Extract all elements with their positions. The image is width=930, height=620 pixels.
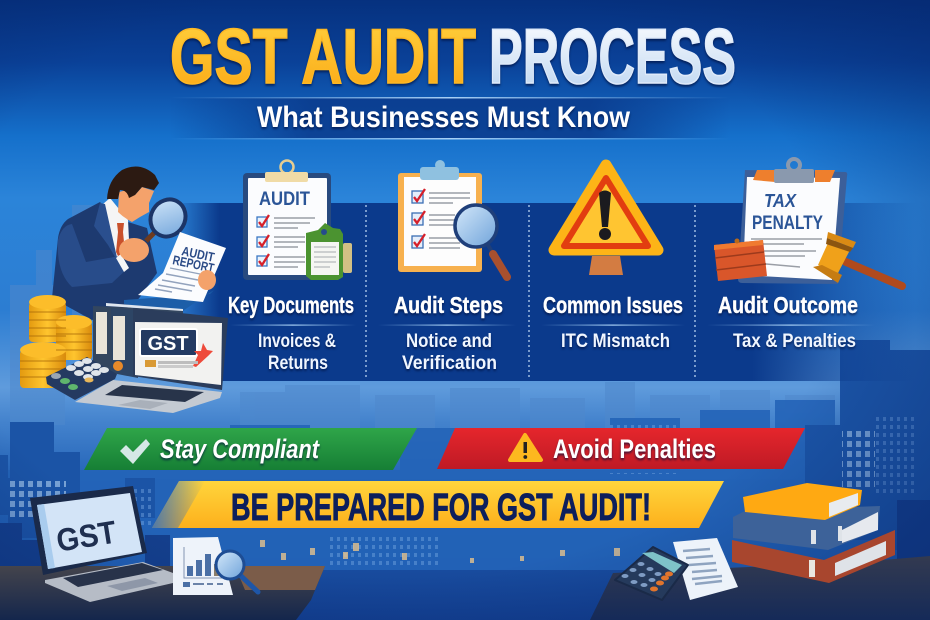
column: audit steps xyxy=(378,160,516,374)
icon: suit xyxy=(52,202,157,320)
icon: laptop with GST screen: GST xyxy=(54,514,119,559)
heading: key documents: Key Documents xyxy=(228,292,354,318)
red book xyxy=(732,530,895,583)
text: notice and verification xyxy=(402,331,497,374)
icon: tax penalty clipboard: PENALTY xyxy=(752,213,823,234)
icon: tie xyxy=(116,223,125,256)
desk: right xyxy=(590,556,930,620)
text: invoices and returns xyxy=(258,331,336,374)
banner: avoid penalties xyxy=(437,428,805,469)
text: notice and verification: Verification xyxy=(402,353,497,374)
icon: check mark xyxy=(120,439,150,464)
auditor illustration xyxy=(52,166,226,320)
banner: be prepared xyxy=(152,481,724,529)
city skyline xyxy=(0,205,930,570)
subtitle xyxy=(170,97,730,140)
column: common issues xyxy=(541,165,685,352)
icon: paper receipt xyxy=(673,538,738,600)
icon: shirt xyxy=(103,198,129,262)
text: notice and verification: Notice and xyxy=(406,331,492,352)
icon: blue folder xyxy=(124,290,214,313)
icon: green document tag xyxy=(306,223,352,280)
banner: stay compliant xyxy=(84,428,417,470)
icon: laptop with GST screen xyxy=(30,486,173,602)
icon: binders xyxy=(93,303,183,378)
icon: hand xyxy=(119,238,149,262)
icon: coin stacks xyxy=(20,295,92,388)
icon: report with bar chart xyxy=(173,537,233,595)
blue book xyxy=(733,506,880,550)
desk: left xyxy=(0,566,325,620)
text: invoices and returns: Invoices & xyxy=(258,331,336,352)
heading: common issues: Common Issues xyxy=(543,292,683,318)
icon: laptop with GST: GST xyxy=(147,333,189,355)
icon: cuff xyxy=(116,254,129,272)
icon: magnifying glass xyxy=(144,193,192,243)
icon: hair xyxy=(107,166,159,199)
icon: magnifying glass xyxy=(455,205,507,277)
icon: audit report paper xyxy=(138,232,226,302)
icon: checklist clipboard xyxy=(398,160,482,272)
heading: audit outcome: Audit Outcome xyxy=(718,292,858,318)
icon: warning sign xyxy=(554,165,658,275)
icon: face xyxy=(118,187,154,222)
subtitle: What Businesses Must Know xyxy=(257,101,631,134)
icon: orange strap bundle xyxy=(714,238,767,281)
icon: desk calculator xyxy=(615,547,688,600)
icon: audit report paper: REPORT xyxy=(171,252,216,276)
icon: audit clipboard xyxy=(243,160,331,280)
icon: laptop with GST xyxy=(75,308,228,413)
title: GST AUDIT xyxy=(170,12,476,100)
banner: avoid penalties: Avoid Penalties xyxy=(553,434,716,464)
icon: tax penalty clipboard xyxy=(738,159,847,284)
icon: lapel xyxy=(94,203,118,262)
icon: stacked books xyxy=(732,483,895,583)
orange book xyxy=(743,483,862,520)
icon: audit report paper: AUDIT xyxy=(180,243,216,265)
icon: tax penalty clipboard: TAX xyxy=(764,191,797,211)
banner: be prepared: BE PREPARED FOR GST AUDIT! xyxy=(231,487,651,529)
panel: four audit columns xyxy=(175,203,915,381)
icon: sleeve xyxy=(58,224,128,287)
icon: warning triangle xyxy=(510,435,541,460)
icon: calculator xyxy=(46,357,117,400)
text: itc mismatch: ITC Mismatch xyxy=(561,331,670,352)
text: invoices and returns: Returns xyxy=(268,353,328,374)
text: tax and penalties: Tax & Penalties xyxy=(733,331,856,352)
column: audit outcome xyxy=(707,159,902,352)
icon: holding hand xyxy=(198,270,216,290)
icon: gavel xyxy=(813,232,902,286)
title: PROCESS xyxy=(489,12,736,100)
banner: stay compliant: Stay Compliant xyxy=(160,434,320,464)
column: key documents xyxy=(228,160,356,374)
icon: audit clipboard: AUDIT xyxy=(259,189,310,210)
heading: audit steps: Audit Steps xyxy=(394,292,503,318)
icon: magnifying glass xyxy=(216,551,258,592)
icon: red star xyxy=(193,343,213,367)
desk wood highlight xyxy=(235,566,325,590)
